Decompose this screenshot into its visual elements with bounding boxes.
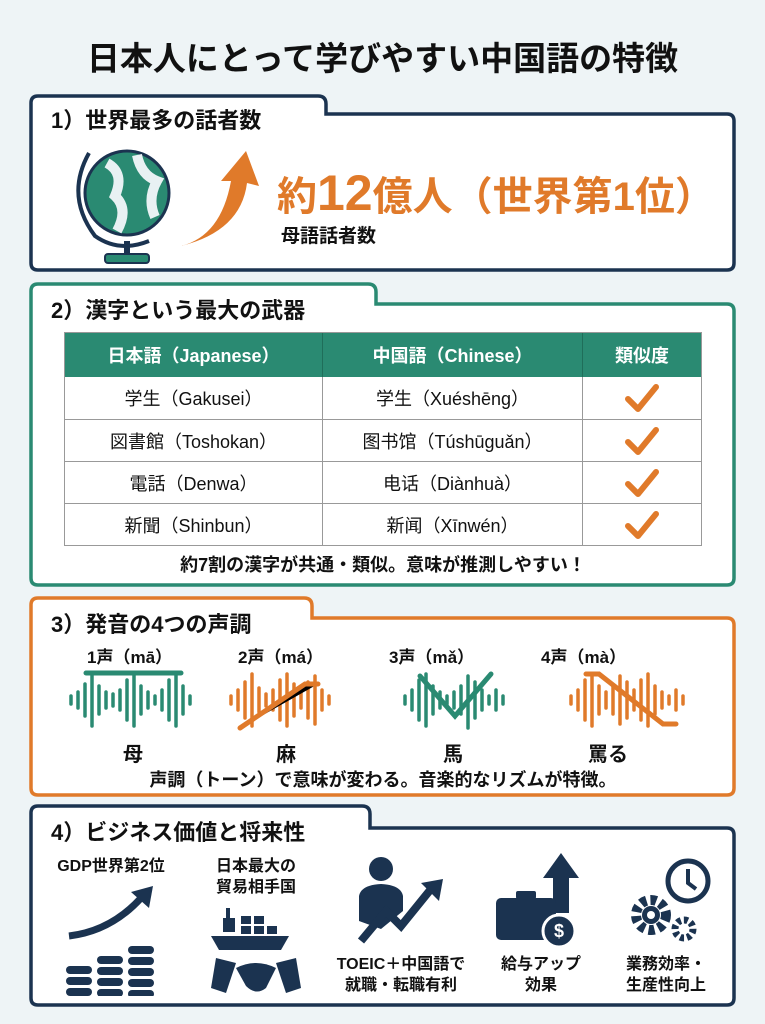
item career: 就職・転職有利: [345, 977, 457, 994]
tone labels: 2声（má）: [238, 648, 323, 667]
heading 2: 2）漢字という最大の武器: [51, 298, 305, 323]
item salary: [496, 853, 581, 994]
item GDP: GDP世界第2位: [57, 858, 165, 875]
heading 3: 3）発音の4つの声調: [51, 612, 251, 637]
caption: 約7割の漢字が共通・類似。意味が推測しやすい！: [180, 555, 586, 575]
table: 図書館（Toshokan）: [110, 432, 277, 452]
item efficiency: [626, 858, 710, 994]
item career: [336, 857, 465, 994]
table: 学生（Xuéshēng）: [376, 389, 529, 409]
panel: tones: [51, 612, 685, 790]
table: 類似度: [615, 346, 669, 366]
item GDP: [57, 857, 165, 996]
item trade: [211, 857, 301, 993]
waveforms: [69, 670, 685, 730]
tone characters: 麻: [276, 744, 296, 766]
tone labels: [87, 648, 626, 667]
heading 4: 4）ビジネス価値と将来性: [51, 820, 305, 845]
tone labels: 1声（mā）: [87, 648, 172, 667]
item efficiency: 生産性向上: [626, 977, 706, 994]
subtext: 母語話者数: [281, 226, 376, 247]
icon: up arrow: [182, 151, 259, 246]
panel: speakers: [51, 108, 715, 264]
panel: business: [51, 820, 710, 996]
title: 日本人にとって学びやすい中国語の特徴: [87, 40, 678, 77]
table: 電話（Denwa）: [129, 474, 258, 494]
table: 新闻（Xīnwén）: [386, 516, 519, 536]
table: 图书馆（Túshūguǎn）: [362, 432, 543, 452]
caption: 声調（トーン）で意味が変わる。音楽的なリズムが特徴。: [149, 770, 617, 790]
tone labels: 3声（mǎ）: [389, 648, 474, 667]
item efficiency: 業務効率・: [626, 956, 706, 973]
item salary: 効果: [525, 977, 557, 994]
table: 电话（Diànhuà）: [383, 474, 522, 494]
big number: 約12億人（世界第1位）: [277, 165, 715, 221]
icon: globe: [76, 150, 170, 264]
table: 日本語（Japanese）: [107, 346, 280, 366]
heading 1: 1）世界最多の話者数: [51, 108, 261, 133]
tone characters: 罵る: [588, 744, 628, 766]
item salary: 給与アップ: [501, 956, 581, 973]
tone characters: 母: [123, 744, 143, 766]
item career: TOEIC＋中国語で: [337, 956, 465, 973]
table: 新聞（Shinbun）: [124, 516, 263, 536]
table: [64, 332, 702, 546]
panel: kanji: [51, 298, 702, 575]
tone characters: 馬: [443, 744, 463, 766]
table: 中国語（Chinese）: [372, 346, 533, 366]
table: 学生（Gakusei）: [124, 389, 263, 409]
item salary: $: [554, 921, 564, 941]
tone labels: 4声（mà）: [541, 648, 626, 667]
item trade: 貿易相手国: [216, 879, 296, 896]
item trade: 日本最大の: [216, 858, 296, 875]
tone characters: [123, 744, 628, 766]
